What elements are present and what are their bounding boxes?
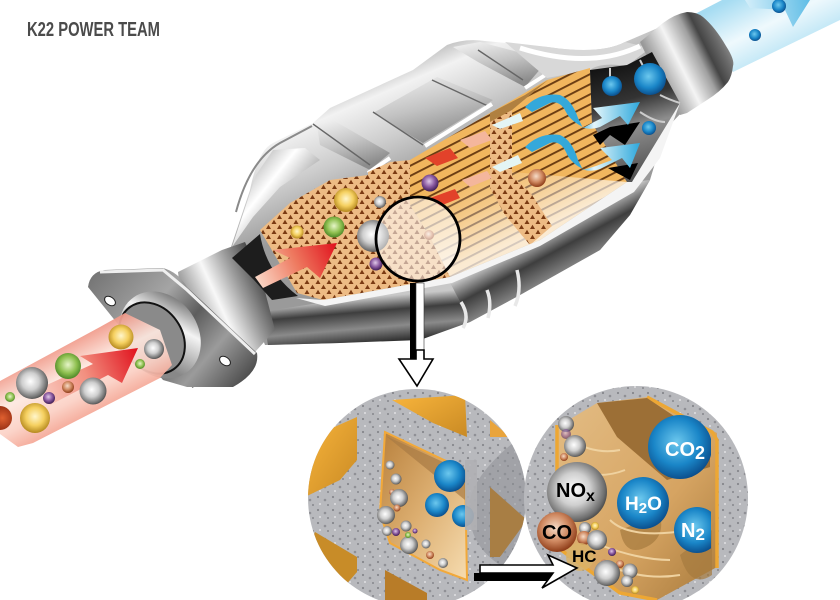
CO2 molecule: 2 [695, 443, 705, 463]
HC label: HC [572, 547, 597, 566]
center cell [380, 432, 467, 580]
connector arrow between circles [474, 555, 577, 588]
slab top ledge [490, 80, 548, 122]
N2 molecule: 2 [695, 525, 705, 544]
shell lip around cut [296, 103, 680, 306]
orange cell bottom middle [385, 570, 427, 600]
blue flow arrow upper [525, 94, 640, 129]
shell ribs [313, 50, 523, 165]
outlet collar [640, 12, 733, 115]
inlet tube with exhaust [0, 313, 172, 447]
shell lower body right [450, 180, 650, 322]
front ledge of the plates [368, 72, 550, 173]
cleaned gas molecules in cavity [602, 63, 666, 135]
orange cell top [392, 395, 467, 437]
magnifier circle [376, 197, 460, 281]
inlet flange [88, 268, 257, 394]
NOx molecule: x [586, 488, 595, 505]
right detail circle [520, 385, 760, 600]
lighter lower stripes [410, 170, 627, 277]
H2O molecule: 2 [639, 500, 647, 517]
orange cell bottom left [314, 532, 357, 582]
NOx molecule: NO [556, 480, 586, 502]
H2O molecule: O [647, 494, 662, 515]
NOx molecule [547, 462, 607, 522]
blue flow arrow lower [525, 134, 640, 171]
HC molecule [566, 543, 594, 571]
dark top triangle [597, 398, 710, 480]
lower ribs [461, 270, 519, 328]
inner dark ring behind the core [232, 234, 298, 300]
down arrow [399, 283, 433, 386]
upper right shoulder [505, 42, 650, 78]
exhaust outlet tube [695, 0, 840, 72]
striped substrate section [410, 68, 627, 277]
H2O molecule: H [625, 494, 639, 515]
second honeycomb slab [490, 110, 552, 245]
flange boss [102, 276, 218, 394]
wood grain [586, 446, 680, 578]
upper particle cluster [558, 416, 639, 594]
shell lower body left [262, 282, 470, 345]
icon: outlet flow arrow [745, 0, 810, 27]
shell plate 2 [373, 77, 493, 143]
inlet collar [178, 242, 275, 388]
flange bore [106, 290, 198, 386]
inlet red arrow [40, 348, 138, 405]
orange cell left [305, 417, 357, 497]
converter shell [230, 25, 700, 345]
flange bolt holes [103, 294, 117, 308]
N2 molecule: N [681, 520, 695, 542]
left cone highlight [232, 148, 320, 247]
left detail circle [308, 389, 525, 600]
particle cluster [377, 460, 448, 568]
outlet cavity [590, 52, 680, 182]
coloured flow dashes [425, 113, 523, 206]
H2O molecule [617, 477, 669, 529]
shell plate 3 [453, 42, 548, 87]
wood cell [557, 397, 717, 600]
cavity struts [610, 60, 680, 122]
honeycomb core front face [260, 160, 450, 300]
shell plate 1 [317, 120, 390, 170]
orange cell upper right [490, 420, 508, 437]
core flow arrow [255, 243, 337, 288]
cell orange border [557, 397, 717, 600]
CO2 molecule: CO [665, 439, 695, 461]
molecule shadows [620, 522, 712, 580]
CO2 molecule [648, 415, 712, 479]
CO molecule: CO [542, 522, 572, 544]
N2 molecule [674, 507, 711, 553]
black shadow arrows [593, 122, 640, 180]
right brown cell [490, 487, 527, 557]
CO molecule [537, 512, 577, 552]
brand label: K22 POWER TEAM [27, 19, 160, 41]
overlap shade [472, 444, 525, 564]
blue molecules [434, 460, 466, 492]
exhaust particles inside the core [290, 169, 546, 270]
